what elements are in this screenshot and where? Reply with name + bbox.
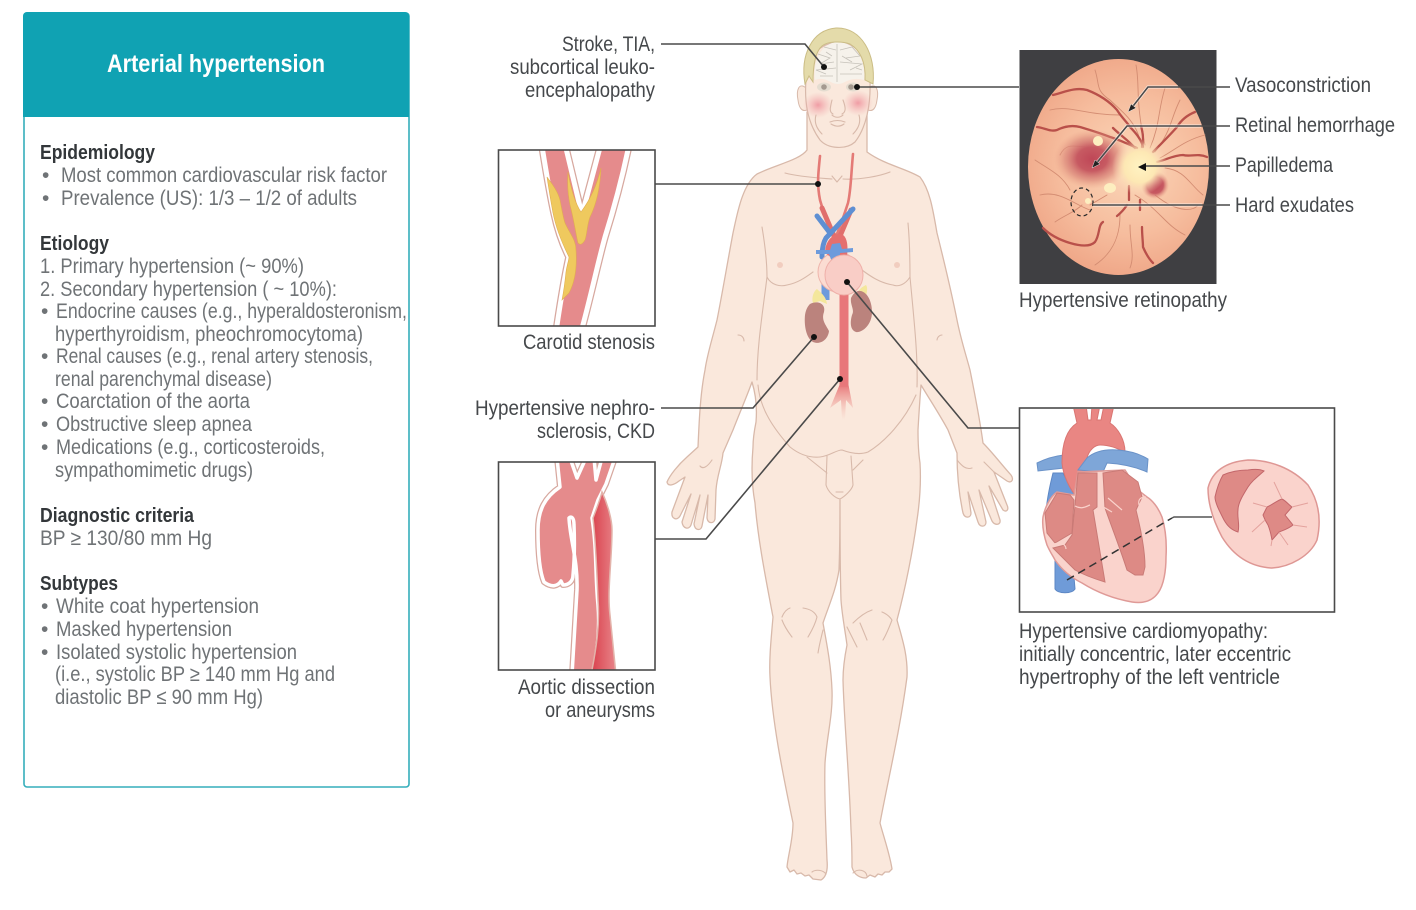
section: epidemiology: Most common cardiovascular risk factor [61, 164, 387, 187]
thin vessels [1035, 65, 1205, 268]
body silhouette [667, 112, 1012, 880]
heart wall [1043, 470, 1166, 603]
section: etiology: Medications (e.g., corticosteroids, [56, 436, 325, 459]
section: subtypes [40, 573, 335, 709]
section: diagnostic criteria: Diagnostic criteria [40, 505, 195, 527]
label: aortic dissection [518, 676, 655, 722]
section: etiology: • [41, 390, 48, 413]
panel: aortic dissection [498, 458, 655, 675]
icon: facial flushing [803, 90, 873, 118]
section: subtypes: • [41, 595, 48, 618]
dashed circle [1071, 188, 1093, 216]
icon: brain overlay [815, 42, 864, 84]
labels: body complications: sclerosis, CKD [537, 420, 655, 443]
plaque [547, 168, 601, 300]
leader: stroke [661, 44, 827, 70]
section: subtypes: (i.e., systolic BP ≥ 140 mm Hg and [55, 663, 335, 686]
caption: retinopathy: Hypertensive retinopathy [1019, 289, 1227, 312]
section: etiology: • [41, 413, 48, 436]
labels: body complications: encephalopathy [525, 79, 655, 102]
cross-section of ventricles [1208, 460, 1319, 568]
organ: heart [816, 234, 863, 300]
labels: retina: Hard exudates [1235, 194, 1354, 217]
label: carotid stenosis: Carotid stenosis [523, 331, 655, 354]
section: etiology: hyperthyroidism, pheochromocytoma) [55, 323, 363, 346]
section: epidemiology: • [42, 187, 49, 210]
hair [804, 28, 873, 84]
caption: cardiomyopathy: hypertrophy of the left ventricle [1019, 666, 1280, 689]
heart illustration [1037, 405, 1166, 603]
right pulmonary vessel [1078, 450, 1148, 472]
caption: cardiomyopathy [1019, 620, 1291, 689]
section line [1067, 518, 1172, 580]
section: etiology: • [41, 345, 48, 368]
papilledema [1112, 139, 1168, 195]
section: subtypes: Isolated systolic hypertension [56, 641, 297, 664]
section: epidemiology [40, 142, 387, 210]
leader: heart [844, 279, 1019, 428]
panel: hypertensive cardiomyopathy [1020, 405, 1334, 612]
section: epidemiology: • [42, 164, 49, 187]
organs: great vessels and carotids [817, 154, 853, 257]
labels: retina: Papilledema [1235, 154, 1333, 177]
label: aortic dissection: Aortic dissection [518, 676, 655, 699]
caption: cardiomyopathy: Hypertensive cardiomyopathy: [1019, 620, 1268, 643]
icon: eyes and face features [815, 82, 860, 134]
section: subtypes: Subtypes [40, 573, 118, 595]
section: diagnostic criteria: BP ≥ 130/80 mm Hg [40, 527, 212, 550]
labels: body complications: subcortical leuko- [510, 56, 655, 79]
section: etiology: Coarctation of the aorta [56, 390, 250, 413]
retina leader lines [1092, 87, 1230, 205]
leader lines to the body [655, 44, 1019, 539]
hemorrhages [1054, 129, 1130, 189]
right atrium [1045, 493, 1074, 543]
section: etiology: sympathomimetic drugs) [55, 459, 253, 482]
section: etiology: renal parenchymal disease) [55, 368, 272, 391]
label: aortic dissection: or aneurysms [545, 699, 655, 722]
section: etiology: Etiology [40, 233, 110, 255]
panel: hypertensive retinopathy [1020, 50, 1230, 284]
section: etiology: • [41, 300, 48, 323]
leader: aorta [655, 376, 843, 539]
organ: aorta [830, 290, 853, 420]
section: subtypes: diastolic BP ≤ 90 mm Hg) [55, 686, 263, 709]
section: etiology: Endocrine causes (e.g., hyperaldosteronism, [56, 300, 407, 323]
panel header: Arterial hypertension [107, 50, 325, 78]
false lumen [591, 492, 616, 675]
caption: cardiomyopathy: initially concentric, later eccentric [1019, 643, 1291, 666]
labels: retina: Retinal hemorrhage [1235, 114, 1395, 137]
right ventricle [1053, 473, 1105, 582]
body contour lines [700, 172, 994, 876]
leader: nephrosclerosis [661, 334, 817, 408]
human body figure [667, 28, 1012, 880]
section: etiology: 2. Secondary hypertension ( ~ 10%): [40, 278, 337, 301]
section: subtypes: • [41, 618, 48, 641]
head and face [797, 28, 878, 147]
aortic arch [1062, 405, 1125, 497]
major vessels [1037, 89, 1207, 263]
panel header [23, 12, 409, 117]
section: epidemiology: Epidemiology [40, 142, 156, 164]
section: etiology [40, 233, 407, 482]
section: etiology: 1. Primary hypertension (~ 90%) [40, 255, 304, 278]
panel: arterial hypertension summary [23, 12, 409, 787]
labels: retina [1235, 74, 1395, 217]
labels: body complications [475, 33, 655, 443]
exudates [1085, 136, 1116, 204]
section: subtypes: • [41, 641, 48, 664]
section: etiology: • [41, 436, 48, 459]
section: epidemiology: Prevalence (US): 1/3 – 1/2 of adults [61, 187, 357, 210]
labels: body complications: Stroke, TIA, [562, 33, 655, 56]
left pulmonary vessel [1037, 455, 1064, 471]
venae cavae [1046, 473, 1076, 593]
section: etiology: Renal causes (e.g., renal artery stenosis, [56, 345, 373, 368]
section: etiology: Obstructive sleep apnea [56, 413, 252, 436]
panel: carotid stenosis [498, 140, 655, 332]
section: subtypes: Masked hypertension [56, 618, 232, 641]
labels: retina: Vasoconstriction [1235, 74, 1371, 97]
organ: kidneys with adrenal glands [805, 285, 872, 343]
leader: carotid [655, 181, 821, 187]
section: diagnostic criteria [40, 505, 212, 550]
section: subtypes: White coat hypertension [56, 595, 259, 618]
leader: retinopathy [854, 84, 1019, 90]
labels: body complications: Hypertensive nephro- [475, 397, 655, 420]
left ventricle [1103, 470, 1145, 575]
